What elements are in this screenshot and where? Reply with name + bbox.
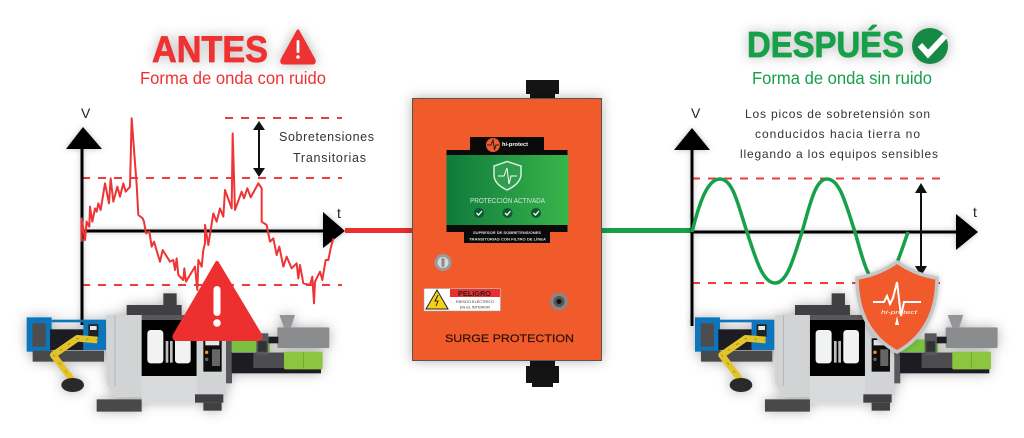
cabinet: surge protector <box>412 80 602 387</box>
display panel: hi-protect <box>502 142 528 148</box>
danger sign <box>424 288 500 311</box>
chart: waveform before <box>66 105 345 325</box>
label V left: V <box>81 105 91 121</box>
danger sign: PELIGRO <box>458 289 491 298</box>
status checks <box>474 208 541 218</box>
text: description: Los picos de sobretensión son <box>745 107 930 121</box>
text: description: llegando a los equipos sensibles <box>740 147 938 161</box>
axis t left <box>82 212 345 248</box>
knob <box>550 292 568 310</box>
display panel: TRANSITORIAS CON FILTRO DE LÍNEA <box>469 236 546 242</box>
display panel: PROTECCIÓN ACTIVADA <box>470 196 545 205</box>
subtitle: con ruido: Forma de onda con ruido <box>140 68 326 88</box>
icon: large warning triangle <box>174 263 261 339</box>
icon: check circle <box>912 28 948 64</box>
gland top <box>526 80 559 99</box>
shield icon <box>494 162 521 190</box>
label: Sobretensiones Transitorias: Transitorias <box>293 151 366 165</box>
machine left <box>27 293 329 412</box>
label: Sobretensiones Transitorias: Sobretensiones <box>279 130 374 144</box>
double arrow: surge height <box>253 121 265 177</box>
danger sign: RIESGO ELÉCTRICO <box>456 299 494 304</box>
display panel <box>446 137 568 243</box>
axis V right <box>674 128 710 326</box>
icon: hi-protect shield: hi-protect <box>881 310 918 316</box>
noisy waveform <box>82 118 333 303</box>
label: Sobretensiones Transitorias <box>279 130 374 165</box>
gland bottom <box>526 360 559 387</box>
text: description: conducidos hacia tierra no <box>755 127 920 141</box>
label t left: t <box>337 205 341 221</box>
subtitle: sin ruido: Forma de onda sin ruido <box>752 68 932 88</box>
red line in <box>345 228 413 233</box>
clean sine wave <box>692 179 908 283</box>
green line out <box>602 228 692 233</box>
icon: hi-protect shield <box>857 262 937 352</box>
machine right <box>695 293 998 412</box>
label t right: t <box>973 204 977 220</box>
display panel: SUPRESOR DE SOBRETENSIONES <box>473 230 541 235</box>
heading: ANTES: ANTES <box>152 29 268 70</box>
axis V left <box>66 127 102 325</box>
double arrow: blocked surge <box>915 183 927 276</box>
chart: waveform after <box>674 105 978 326</box>
indicator light <box>434 254 452 271</box>
danger sign: EN EL INTERIOR <box>460 306 490 310</box>
text: description <box>740 107 938 161</box>
heading: DESPUÉS: DESPUÉS <box>747 24 904 65</box>
label: SURGE PROTECTION: SURGE PROTECTION <box>445 333 574 345</box>
icon: warning triangle small <box>282 31 314 63</box>
label V right: V <box>691 105 701 121</box>
axis t right <box>692 214 978 250</box>
